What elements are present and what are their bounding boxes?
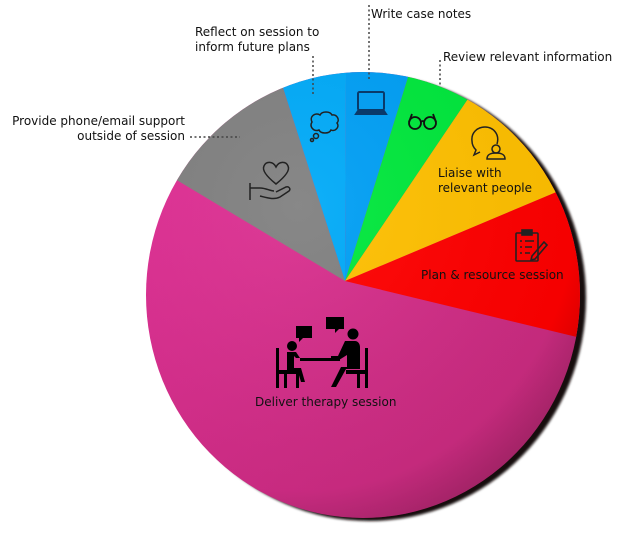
slice: liaise [345,100,556,281]
slice: case notes [345,72,408,281]
label: write case notes [369,5,471,80]
label: reflect: Reflect on session to [195,25,319,39]
label: provide support [12,114,240,143]
label: reflect: inform future plans [195,40,310,54]
icon: heart hand [250,162,290,200]
slice: deliver therapy session [140,70,590,530]
pie chart [146,72,580,518]
label: provide support: outside of session [77,129,185,143]
icon: therapy session [276,317,368,388]
icon: chat person [472,127,505,159]
icon: clipboard [516,230,547,261]
label: deliver: Deliver therapy session [255,395,396,409]
slice: review [345,76,468,281]
label: liaise: Liaise with [438,166,502,180]
slice: plan [345,192,580,337]
label: reflect [195,25,319,95]
label: provide support: Provide phone/email support [12,114,185,128]
slice: phone/email support [177,88,345,281]
pie shadow [152,75,586,521]
icon: thought cloud [310,112,338,142]
label: plan: Plan & resource session [421,268,564,282]
label: write case notes: Write case notes [371,7,471,21]
label: liaise: relevant people [438,181,532,195]
label: review: Review relevant information [443,50,612,64]
slice: reflect [283,72,346,281]
icon: glasses [409,114,436,129]
icon: laptop [356,92,386,114]
